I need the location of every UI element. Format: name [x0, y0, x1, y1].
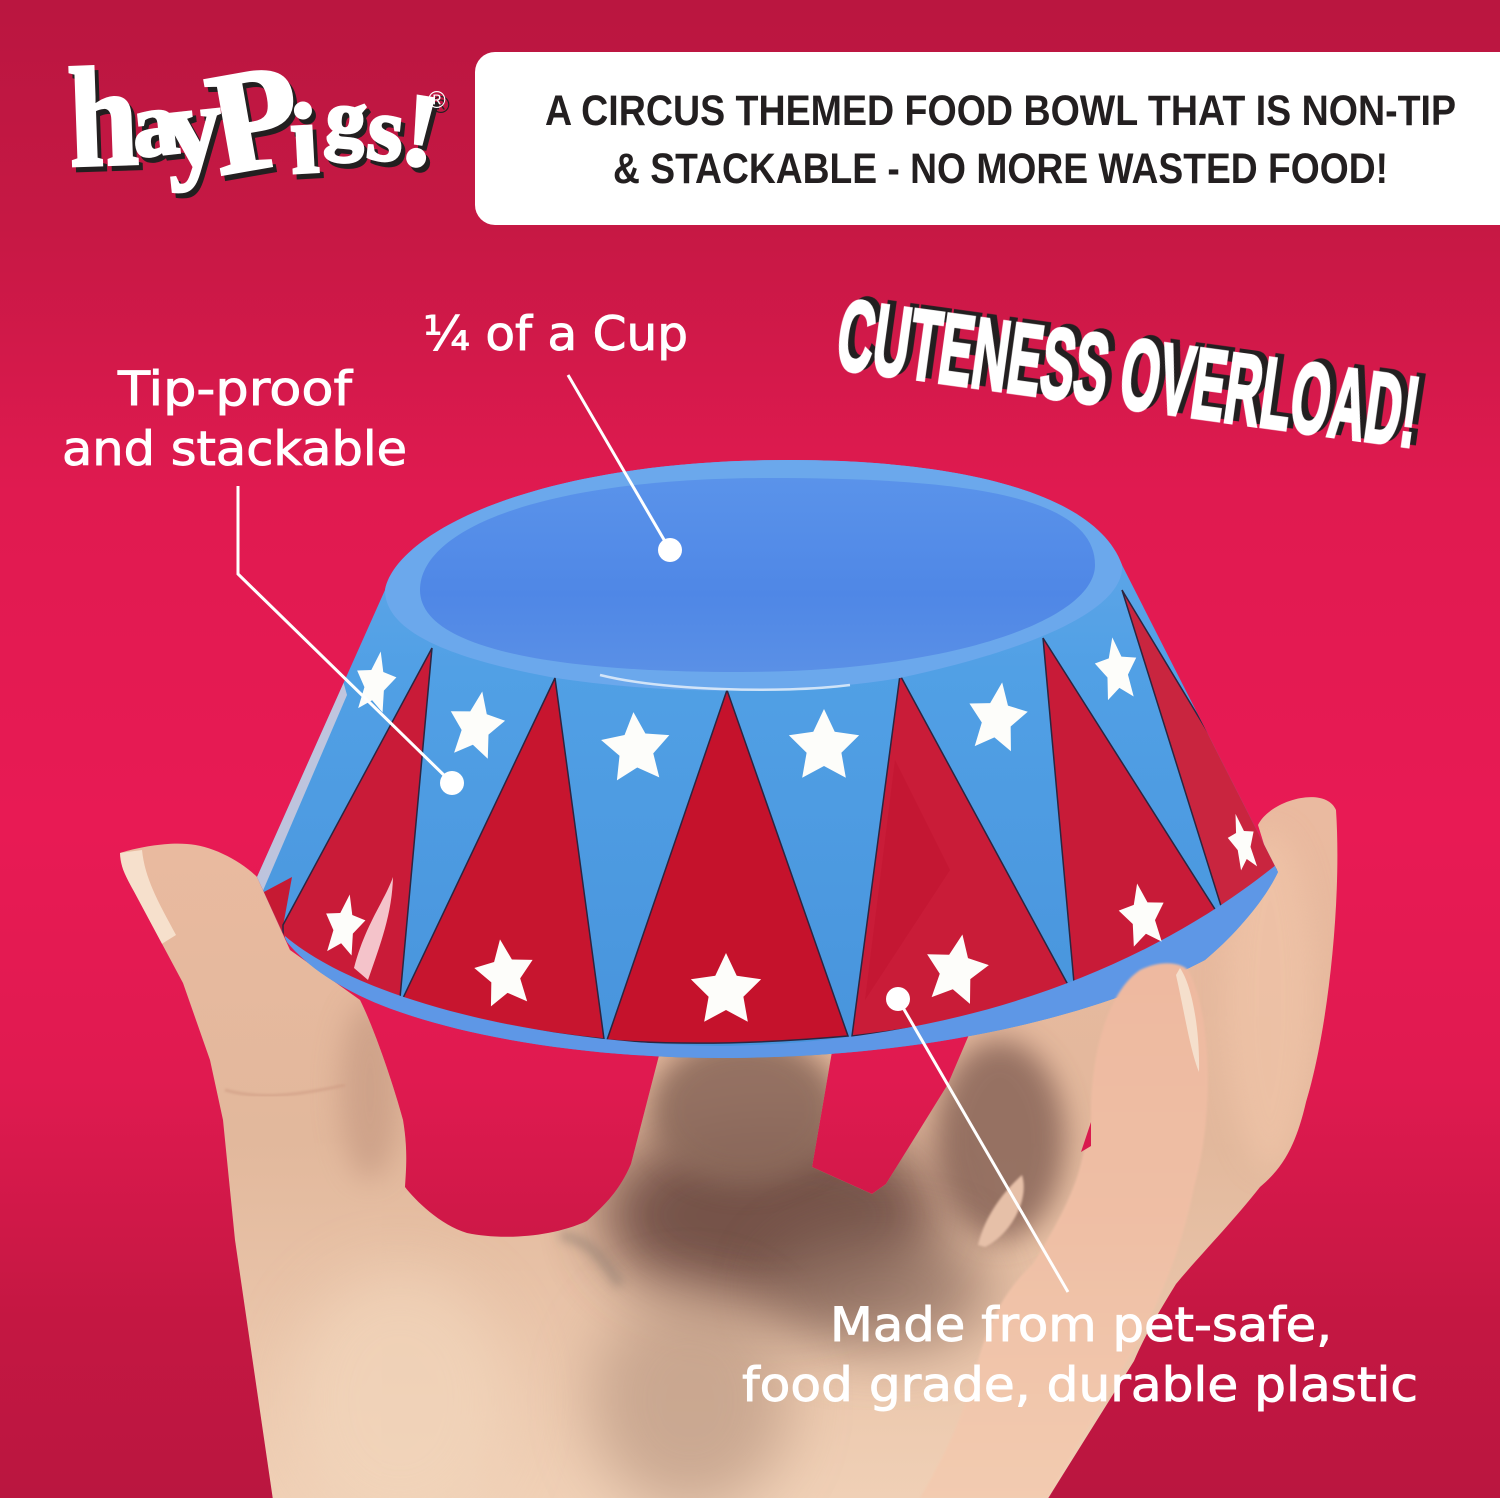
logo: hayPigs! — [66, 31, 447, 207]
logo: hayPigs!: h — [66, 37, 141, 197]
bottom blue band — [285, 866, 1278, 1058]
bowl stars — [320, 634, 1262, 1022]
logo: hayPigs!: P — [196, 31, 312, 207]
fingernail — [1176, 968, 1199, 1072]
callout: materials — [742, 987, 1418, 1413]
callout: tip-proof: Tip-proof — [117, 362, 354, 417]
logo: hayPigs!: ! — [394, 71, 447, 190]
logo: hayPigs!: g — [322, 73, 370, 164]
panel: header — [475, 52, 1500, 225]
callout: one quarter cup: ¼ of a Cup — [423, 307, 688, 362]
callout: tip-proof: and stackable — [62, 422, 407, 477]
logo: hayPigs!: i — [287, 83, 321, 195]
bowl — [250, 460, 1300, 1070]
logo: hayPigs!: s — [363, 76, 409, 182]
photo: hand holding the bowl — [100, 460, 1360, 1500]
logo: hayPigs!: ® — [428, 87, 446, 114]
callout: materials: food grade, durable plastic — [742, 1358, 1418, 1413]
bowl body — [257, 460, 1278, 1058]
logo: hayPigs!: a — [126, 71, 183, 177]
callout: materials: Made from pet-safe, — [830, 1298, 1332, 1353]
bowl pattern — [250, 590, 1300, 1070]
finger gap — [1081, 1122, 1091, 1152]
bottom edge strip — [0, 1498, 1500, 1500]
callout: one quarter cup — [423, 307, 688, 562]
logo: hayPigs!: y — [157, 60, 228, 194]
callout: tip-proof — [62, 362, 464, 795]
hand — [100, 780, 1360, 1500]
heading line 2: & STACKABLE - NO MORE WASTED FOOD! — [613, 145, 1388, 193]
bowl rim — [385, 460, 1122, 691]
ring fingernail — [978, 1175, 1024, 1247]
front finger — [920, 963, 1208, 1498]
